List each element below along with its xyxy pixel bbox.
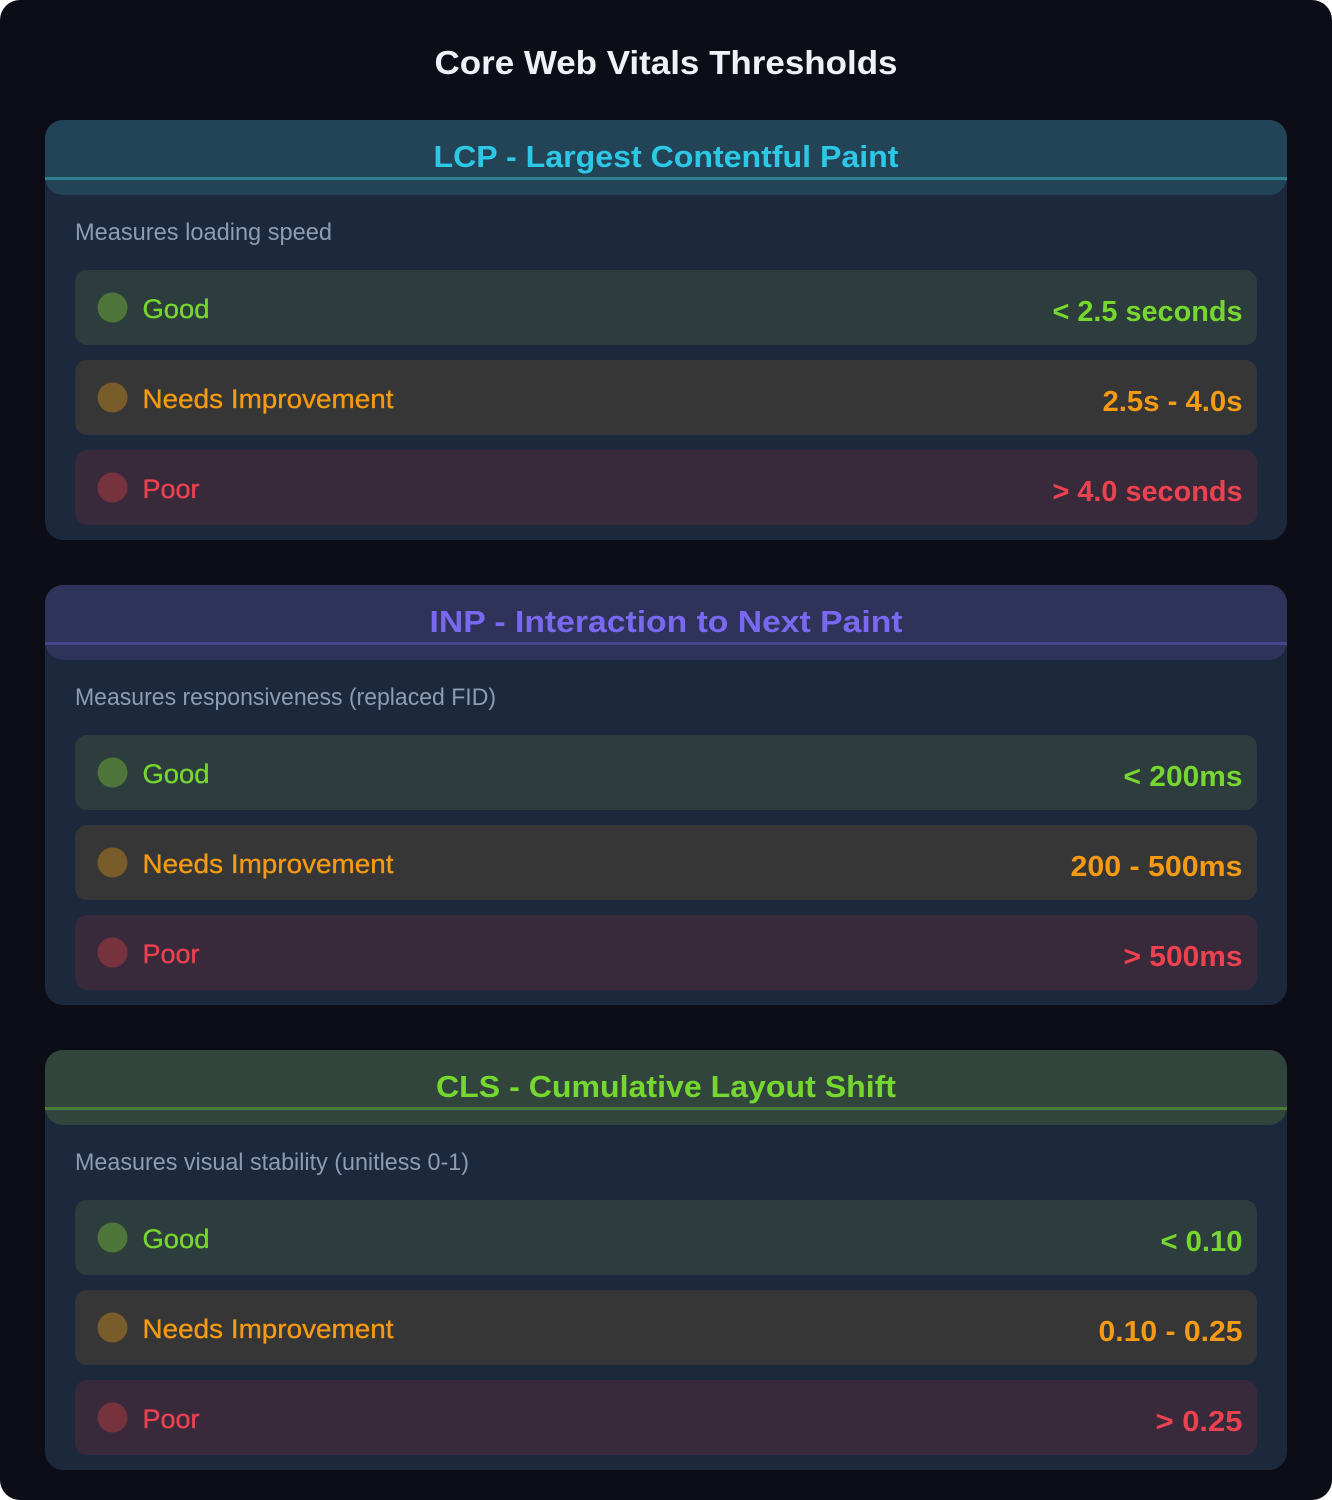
INP good row: Good (142, 759, 210, 789)
LCP header: LCP - Largest Contentful Paint (434, 139, 898, 174)
INP header: INP - Interaction to Next Paint (430, 604, 902, 639)
LCP needs improvement row (75, 360, 1257, 435)
LCP good row (75, 270, 1257, 345)
CLS good row (75, 1200, 1257, 1275)
LCP poor row: > 4.0 seconds (1052, 476, 1242, 508)
panel: CLS (45, 1050, 1287, 1470)
LCP poor row (75, 450, 1257, 525)
CLS good row: < 0.10 (1160, 1226, 1242, 1258)
LCP needs improvement row: Needs Improvement (142, 384, 394, 414)
title: Core Web Vitals Thresholds (434, 44, 898, 81)
LCP description: Measures loading speed (75, 219, 332, 246)
INP needs improvement row: 200 - 500ms (1070, 851, 1242, 883)
CLS poor row (75, 1380, 1257, 1455)
panel: LCP (45, 120, 1287, 540)
INP needs improvement row: Needs Improvement (142, 849, 394, 879)
INP good row (75, 735, 1257, 810)
CLS poor row: > 0.25 (1156, 1406, 1242, 1438)
LCP header (45, 120, 1287, 195)
CLS description: Measures visual stability (unitless 0-1) (75, 1149, 469, 1176)
CLS header: CLS - Cumulative Layout Shift (436, 1069, 896, 1104)
LCP poor row: Poor (142, 474, 200, 504)
INP header (45, 585, 1287, 660)
CLS needs improvement row: 0.10 - 0.25 (1098, 1316, 1242, 1348)
LCP good row: Good (142, 294, 210, 324)
INP poor row: > 500ms (1124, 941, 1242, 973)
CLS good row: Good (142, 1224, 210, 1254)
CLS header (45, 1050, 1287, 1125)
INP poor row (75, 915, 1257, 990)
INP description: Measures responsiveness (replaced FID) (75, 684, 496, 711)
INP good row: < 200ms (1124, 761, 1242, 793)
INP needs improvement row (75, 825, 1257, 900)
LCP needs improvement row: 2.5s - 4.0s (1102, 386, 1242, 418)
CLS needs improvement row (75, 1290, 1257, 1365)
INP poor row: Poor (142, 939, 200, 969)
panel: INP (45, 585, 1287, 1005)
LCP good row: < 2.5 seconds (1052, 296, 1242, 328)
CLS poor row: Poor (142, 1404, 200, 1434)
CLS needs improvement row: Needs Improvement (142, 1314, 394, 1344)
